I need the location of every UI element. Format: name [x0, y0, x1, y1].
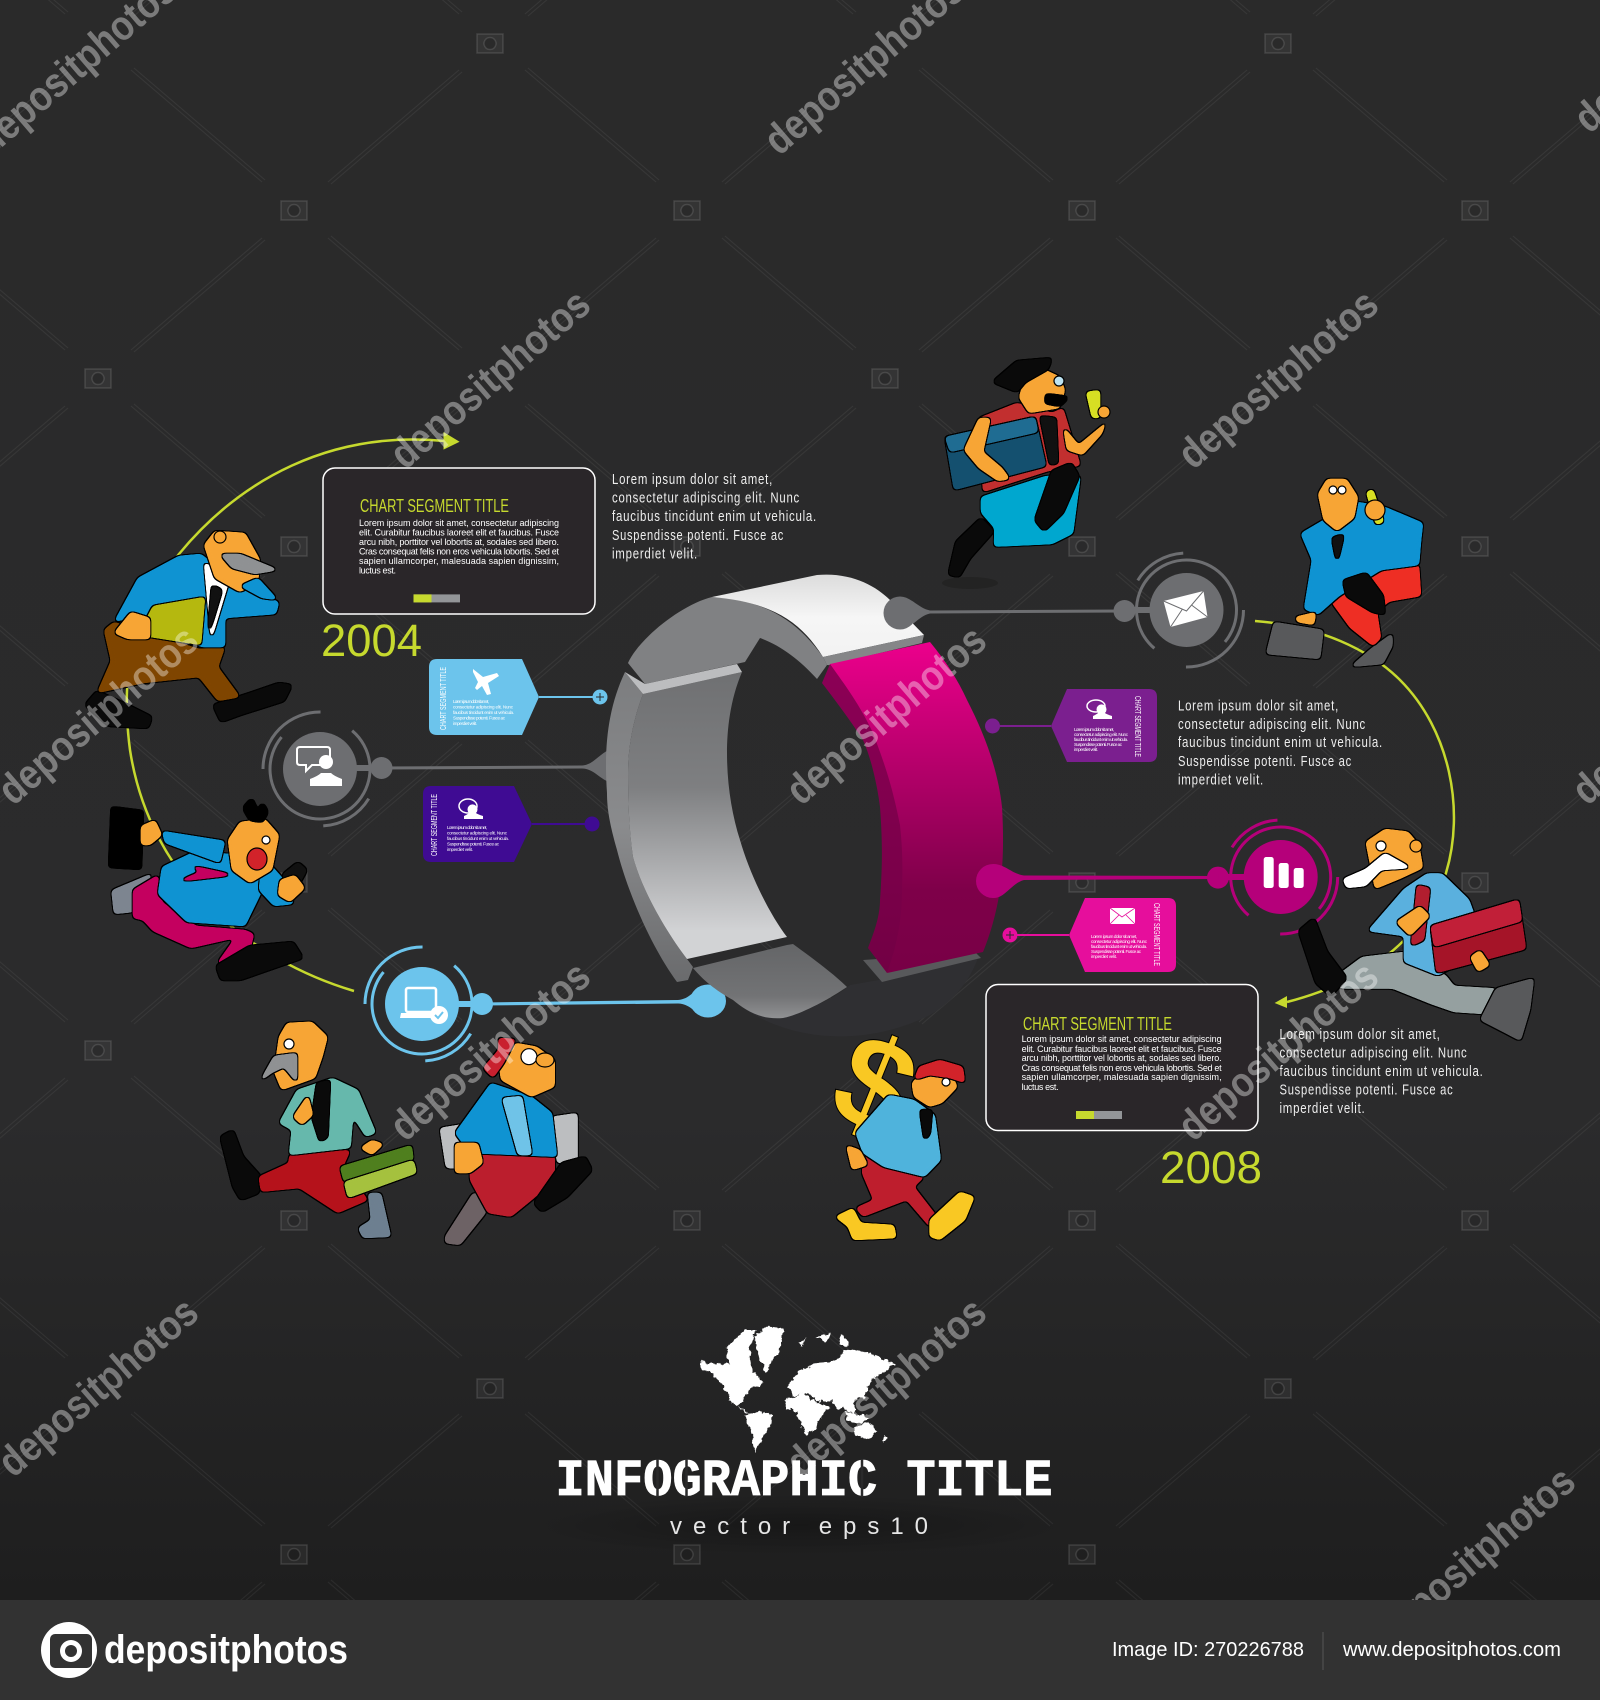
- tag: blue plane: Suspendisse potenti. Fusce ac: [453, 716, 506, 720]
- tag: pink envelope: consectetur adipiscing elit. Nunc: [1091, 939, 1148, 944]
- tag: pink envelope: Lorem ipsum dolor sit amet,: [1091, 934, 1137, 939]
- image id: Image ID: 270226788: [1112, 1639, 1304, 1661]
- ring segment: left outer wall: [606, 672, 693, 982]
- ring shadow: [733, 958, 978, 1036]
- panel body text: [1022, 1034, 1222, 1092]
- tag: pink envelope: imperdiet velit.: [1091, 954, 1117, 959]
- right green arrow curve: [1255, 621, 1454, 1008]
- text block: right middle: imperdiet velit.: [1178, 772, 1264, 789]
- panel body text: luctus est.: [1022, 1082, 1059, 1092]
- ring chart: [606, 575, 1003, 1036]
- icon circle: grey person speech: [250, 699, 390, 839]
- text block: top centre: Lorem ipsum dolor sit amet,: [612, 471, 773, 488]
- text block: right middle: faucibus tincidunt enim ut vehicula.: [1178, 734, 1383, 751]
- connector: magenta: [976, 864, 1229, 898]
- tag: blue plane: CHART SEGMENT TITLE: [438, 667, 448, 730]
- text block: right middle: [1178, 697, 1383, 789]
- panel body text: Lorem ipsum dolor sit amet, consectetur adipiscing: [359, 518, 559, 528]
- character: man in red cap carrying grey boards: [440, 1038, 592, 1245]
- main title: INFOGRAPHIC TITLE: [556, 1452, 1052, 1511]
- watermarks: depositphotos: [1168, 280, 1387, 477]
- text block: right middle: Suspendisse potenti. Fusce ac: [1178, 753, 1352, 770]
- character: man carrying dollar sign: $: [814, 1003, 937, 1166]
- light strip: [625, 664, 742, 694]
- tag: violet person cloud right: [985, 689, 1157, 762]
- tag: purple person cloud: faucibus tincidunt enim ut vehicula.: [447, 836, 509, 841]
- icon: world map: [701, 1327, 894, 1452]
- tag: pink envelope: faucibus tincidunt enim ut vehicula.: [1091, 944, 1147, 949]
- progress bar: [414, 594, 460, 602]
- panel body text: sapien ullamcorper, malesuada sapien dignissim,: [1022, 1072, 1222, 1082]
- character: running man with glasses, red shirt, teal trousers: [942, 358, 1110, 589]
- watermarks: depositphotos: [776, 616, 995, 813]
- tag: pink envelope: Suspendisse potenti. Fusce ac: [1091, 949, 1142, 954]
- tag: purple person cloud: Lorem ipsum dolor sit amet,: [447, 825, 487, 830]
- ring segment: white top: [712, 575, 924, 657]
- panel body text: sapien ullamcorper, malesuada sapien dignissim,: [359, 556, 559, 566]
- text block: lower right: [1280, 1026, 1484, 1117]
- text block: lower right: imperdiet velit.: [1280, 1100, 1366, 1117]
- icon circle: grey envelope: [1116, 540, 1257, 680]
- tag: pink envelope: CHART SEGMENT TITLE: [1152, 903, 1162, 966]
- year 2008: 2008: [1160, 1142, 1262, 1193]
- tag: violet person cloud right: consectetur adipiscing elit. Nunc: [1074, 732, 1129, 737]
- text block: top centre: Suspendisse potenti. Fusce ac: [612, 527, 784, 544]
- text block: top centre: imperdiet velit.: [612, 545, 698, 562]
- panel body text: arcu nibh, porttitor vel lobortis at, sodales sed libero.: [359, 537, 559, 547]
- panel: chart segment 2004: [323, 468, 595, 614]
- progress bar: [1076, 1111, 1122, 1119]
- tag: purple person cloud: [423, 786, 600, 862]
- text block: lower right: Lorem ipsum dolor sit amet,: [1280, 1026, 1440, 1043]
- ring segment: magenta inner wall: [822, 664, 920, 973]
- panel title: CHART SEGMENT TITLE: [360, 496, 509, 516]
- character: man carrying dollar sign: [814, 1003, 974, 1240]
- icon circle: magenta bars: [1210, 807, 1351, 947]
- tag: violet person cloud right: CHART SEGMENT TITLE: [1133, 696, 1143, 757]
- tag: violet person cloud right: Suspendisse potenti. Fusce ac: [1074, 742, 1123, 747]
- tag: blue plane: faucibus tincidunt enim ut vehicula.: [453, 710, 514, 715]
- panel body text: Cras consequat felis non eros vehicula lobortis. Sed et: [359, 546, 559, 556]
- panel body text: elit. Curabitur faucibus laoreet elit et faucibus. Fusce: [1022, 1044, 1222, 1054]
- panel body text: Lorem ipsum dolor sit amet, consectetur adipiscing: [1022, 1034, 1222, 1044]
- ring segment: bottom grey: [693, 944, 847, 1018]
- text block: lower right: faucibus tincidunt enim ut vehicula.: [1280, 1063, 1484, 1080]
- watermarks: depositphotos: [380, 952, 599, 1149]
- white segment side: [823, 635, 924, 665]
- watermarks: depositphotos: [776, 1288, 995, 1485]
- tag: violet person cloud right: imperdiet velit.: [1074, 747, 1098, 752]
- website: www.depositphotos.com: [1342, 1639, 1561, 1661]
- connector: grey left: [370, 749, 612, 783]
- tag: blue plane: [429, 659, 608, 735]
- tag: purple person cloud: Suspendisse potenti. Fusce ac: [447, 842, 500, 846]
- character: bald man with grey mustache, green briefcase: [220, 1022, 417, 1238]
- text block: lower right: Suspendisse potenti. Fusce ac: [1280, 1082, 1454, 1099]
- character: man with mustache, blue jacket, brown trousers: [85, 531, 292, 728]
- watermarks: depositphotos: [1168, 952, 1387, 1149]
- icon circle: blue laptop: [352, 934, 492, 1074]
- text block: top centre: [612, 471, 817, 562]
- text block: right middle: Lorem ipsum dolor sit amet,: [1178, 697, 1339, 714]
- subtitle: vector eps10: [670, 1513, 928, 1540]
- connector: grey top right: [900, 597, 1136, 629]
- connector: blue: [471, 984, 726, 1018]
- panel body text: luctus est.: [359, 565, 396, 575]
- ring segment: top-left grey: [628, 597, 827, 684]
- footer logo text: depositphotos: [104, 1628, 348, 1672]
- ring blob: top: [884, 596, 916, 630]
- footer bar: [0, 1600, 1600, 1700]
- tag: violet person cloud right: faucibus tincidunt enim ut vehicula.: [1074, 737, 1128, 742]
- tag: blue plane: consectetur adipiscing elit. Nunc: [453, 704, 514, 710]
- text block: lower right: consectetur adipiscing elit. Nunc: [1280, 1045, 1468, 1062]
- character: man on phone, blue jacket, red trousers: [1266, 479, 1423, 667]
- title shadow: [530, 1495, 1070, 1555]
- panel body text: [359, 518, 559, 575]
- tag: violet person cloud right: Lorem ipsum dolor sit amet,: [1074, 727, 1114, 732]
- ring segment: magenta face: [830, 642, 1003, 973]
- character: running man with white mustache, red briefcase: [1299, 829, 1534, 1041]
- character: angry man shouting at phone: [109, 798, 307, 980]
- tag: purple person cloud: consectetur adipiscing elit. Nunc: [447, 830, 508, 836]
- panel body text: Cras consequat felis non eros vehicula lobortis. Sed et: [1022, 1063, 1222, 1073]
- panel body text: arcu nibh, porttitor vel lobortis at, sodales sed libero.: [1022, 1053, 1222, 1063]
- tag: pink envelope: [1002, 898, 1176, 972]
- watermarks: depositphotos: [380, 280, 599, 477]
- tag: blue plane: Lorem ipsum dolor sit amet,: [453, 699, 489, 704]
- tag: purple person cloud: CHART SEGMENT TITLE: [429, 794, 439, 856]
- text block: top centre: faucibus tincidunt enim ut vehicula.: [612, 508, 817, 525]
- panel title: CHART SEGMENT TITLE: [1023, 1014, 1172, 1034]
- magenta base: [863, 952, 981, 982]
- panel body text: elit. Curabitur faucibus laoreet elit et faucibus. Fusce: [359, 528, 559, 538]
- year 2004: 2004: [321, 615, 422, 666]
- footer logo icon: [41, 1622, 97, 1678]
- text block: top centre: consectetur adipiscing elit. Nunc: [612, 490, 800, 507]
- left green arrow curve: [127, 432, 460, 991]
- panel: chart segment 2008: [986, 984, 1258, 1130]
- tag: purple person cloud: imperdiet velit.: [447, 847, 473, 852]
- ring segment: left front face: [628, 672, 787, 959]
- text block: right middle: consectetur adipiscing elit. Nunc: [1178, 716, 1366, 733]
- tag: blue plane: imperdiet velit.: [453, 721, 477, 726]
